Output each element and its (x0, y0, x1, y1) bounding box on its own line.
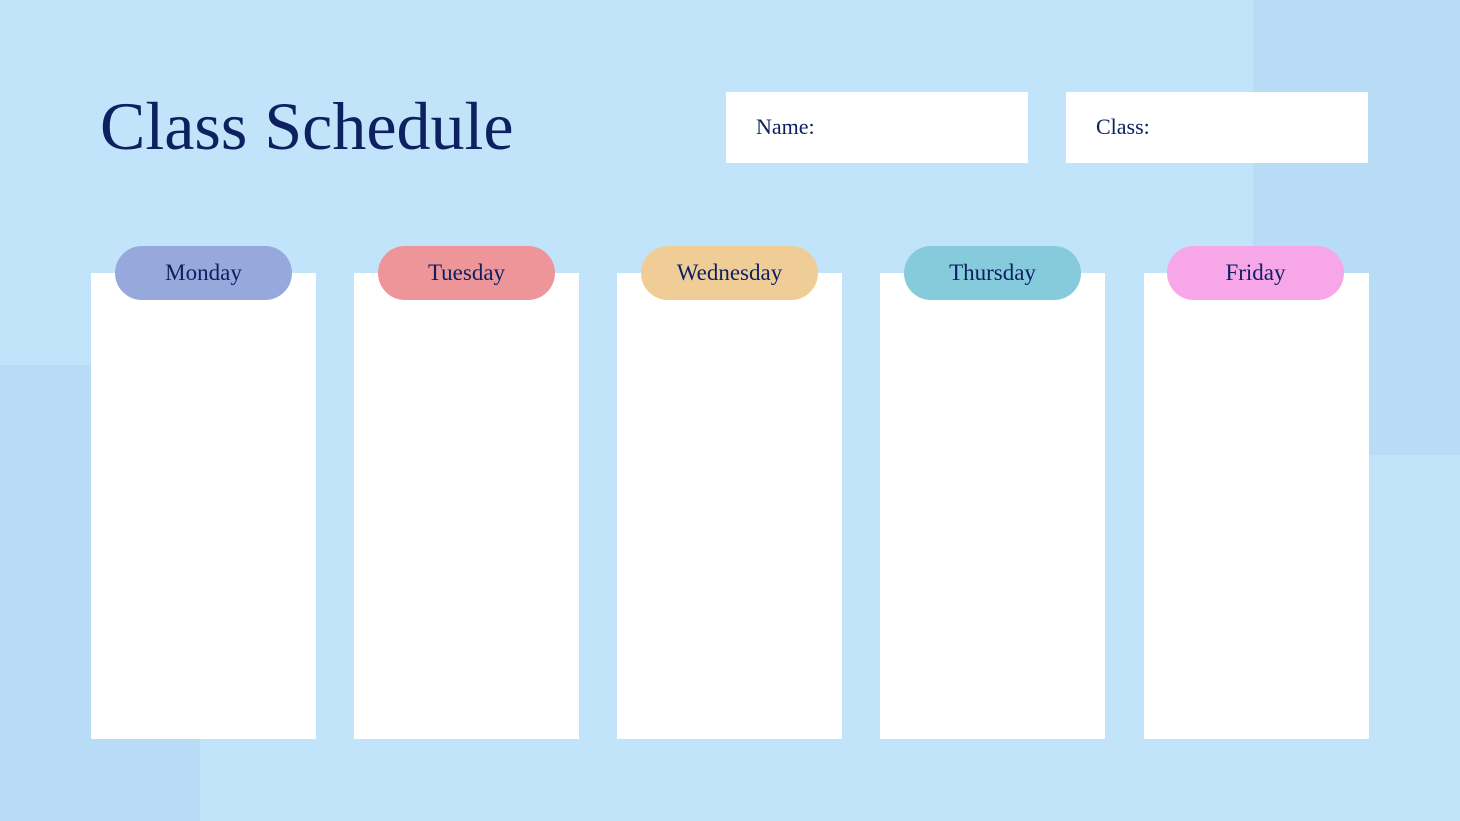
label: Thursday: Thursday (949, 260, 1036, 285)
background shape: bottom left (0, 365, 200, 821)
label: Monday (115, 246, 292, 300)
label: Friday: Friday (1225, 260, 1286, 285)
field: name: Name: (756, 114, 815, 139)
panel: monday (91, 273, 316, 739)
label: Wednesday: Wednesday (677, 260, 782, 285)
label: Tuesday: Tuesday (428, 260, 505, 285)
panel: wednesday (617, 273, 842, 739)
field: name (726, 92, 1028, 163)
label: Thursday (904, 246, 1081, 300)
panel: friday (1144, 273, 1369, 739)
label: Tuesday (378, 246, 555, 300)
background shape: top right (1253, 0, 1460, 455)
panel: tuesday (354, 273, 579, 739)
field: class: Class: (1096, 114, 1150, 139)
panel: thursday (880, 273, 1105, 739)
field: class (1066, 92, 1368, 163)
label: Friday (1167, 246, 1344, 300)
label: Wednesday (641, 246, 818, 300)
label: Monday: Monday (165, 260, 242, 285)
title: Class Schedule (100, 88, 514, 164)
